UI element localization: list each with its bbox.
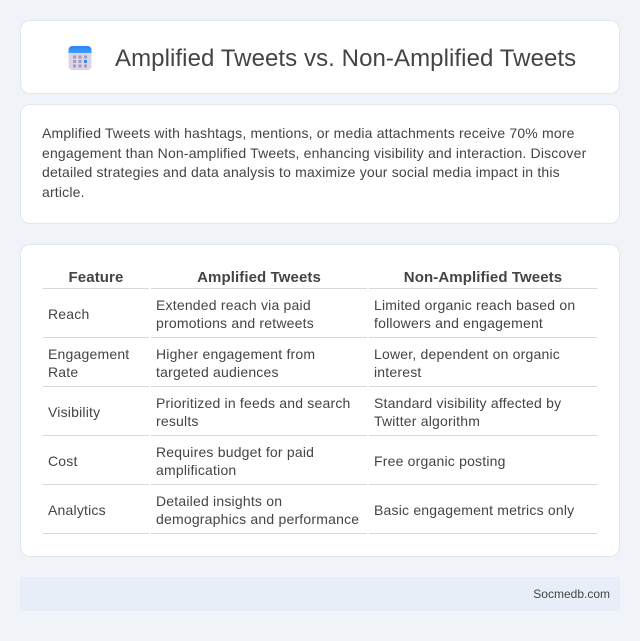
comparison table <box>43 269 597 534</box>
comparison table: Amplified Tweets <box>197 269 321 286</box>
footer credit: Socmedb.com <box>533 587 610 601</box>
comparison table: Rate <box>48 364 78 380</box>
title: Amplified Tweets vs. Non-Amplified Tweets <box>115 45 576 72</box>
panel: title card <box>20 20 620 94</box>
comparison table: Detailed insights on <box>156 493 282 509</box>
comparison table: Cost <box>48 453 78 469</box>
panel: intro card <box>20 104 620 224</box>
comparison table: followers and engagement <box>374 315 543 331</box>
comparison table: results <box>156 413 199 429</box>
comparison table: Engagement <box>48 346 129 362</box>
intro text: Amplified Tweets with hashtags, mentions, or media attachments receive 70% more <box>42 125 575 141</box>
footer bar <box>20 577 620 611</box>
comparison table: Feature <box>69 269 123 286</box>
comparison table: Analytics <box>48 502 106 518</box>
comparison table: Lower, dependent on organic <box>374 346 560 362</box>
intro text: engagement than Non-amplified Tweets, enhancing visibility and interaction. Discover <box>42 144 586 160</box>
icon: calendar <box>68 46 92 70</box>
comparison table: Prioritized in feeds and search <box>156 395 351 411</box>
comparison table: Reach <box>48 306 89 322</box>
comparison table: promotions and retweets <box>156 315 314 331</box>
comparison table: demographics and performance <box>156 511 359 527</box>
comparison table: Non-Amplified Tweets <box>404 269 562 286</box>
intro text: article. <box>42 184 85 200</box>
comparison table: Twitter algorithm <box>374 413 480 429</box>
comparison table: amplification <box>156 462 236 478</box>
comparison table: interest <box>374 364 422 380</box>
comparison table: targeted audiences <box>156 364 279 380</box>
comparison table: Visibility <box>48 404 100 420</box>
intro text <box>42 125 586 200</box>
comparison table: Basic engagement metrics only <box>374 502 574 518</box>
comparison table: Extended reach via paid <box>156 297 311 313</box>
comparison table: Standard visibility affected by <box>374 395 561 411</box>
intro text: detailed strategies and data analysis to maximize your social media impact in this <box>42 164 560 180</box>
panel: table card <box>20 244 620 557</box>
comparison table: Higher engagement from <box>156 346 315 362</box>
comparison table: Free organic posting <box>374 453 506 469</box>
comparison table: Requires budget for paid <box>156 444 314 460</box>
comparison table: Limited organic reach based on <box>374 297 575 313</box>
